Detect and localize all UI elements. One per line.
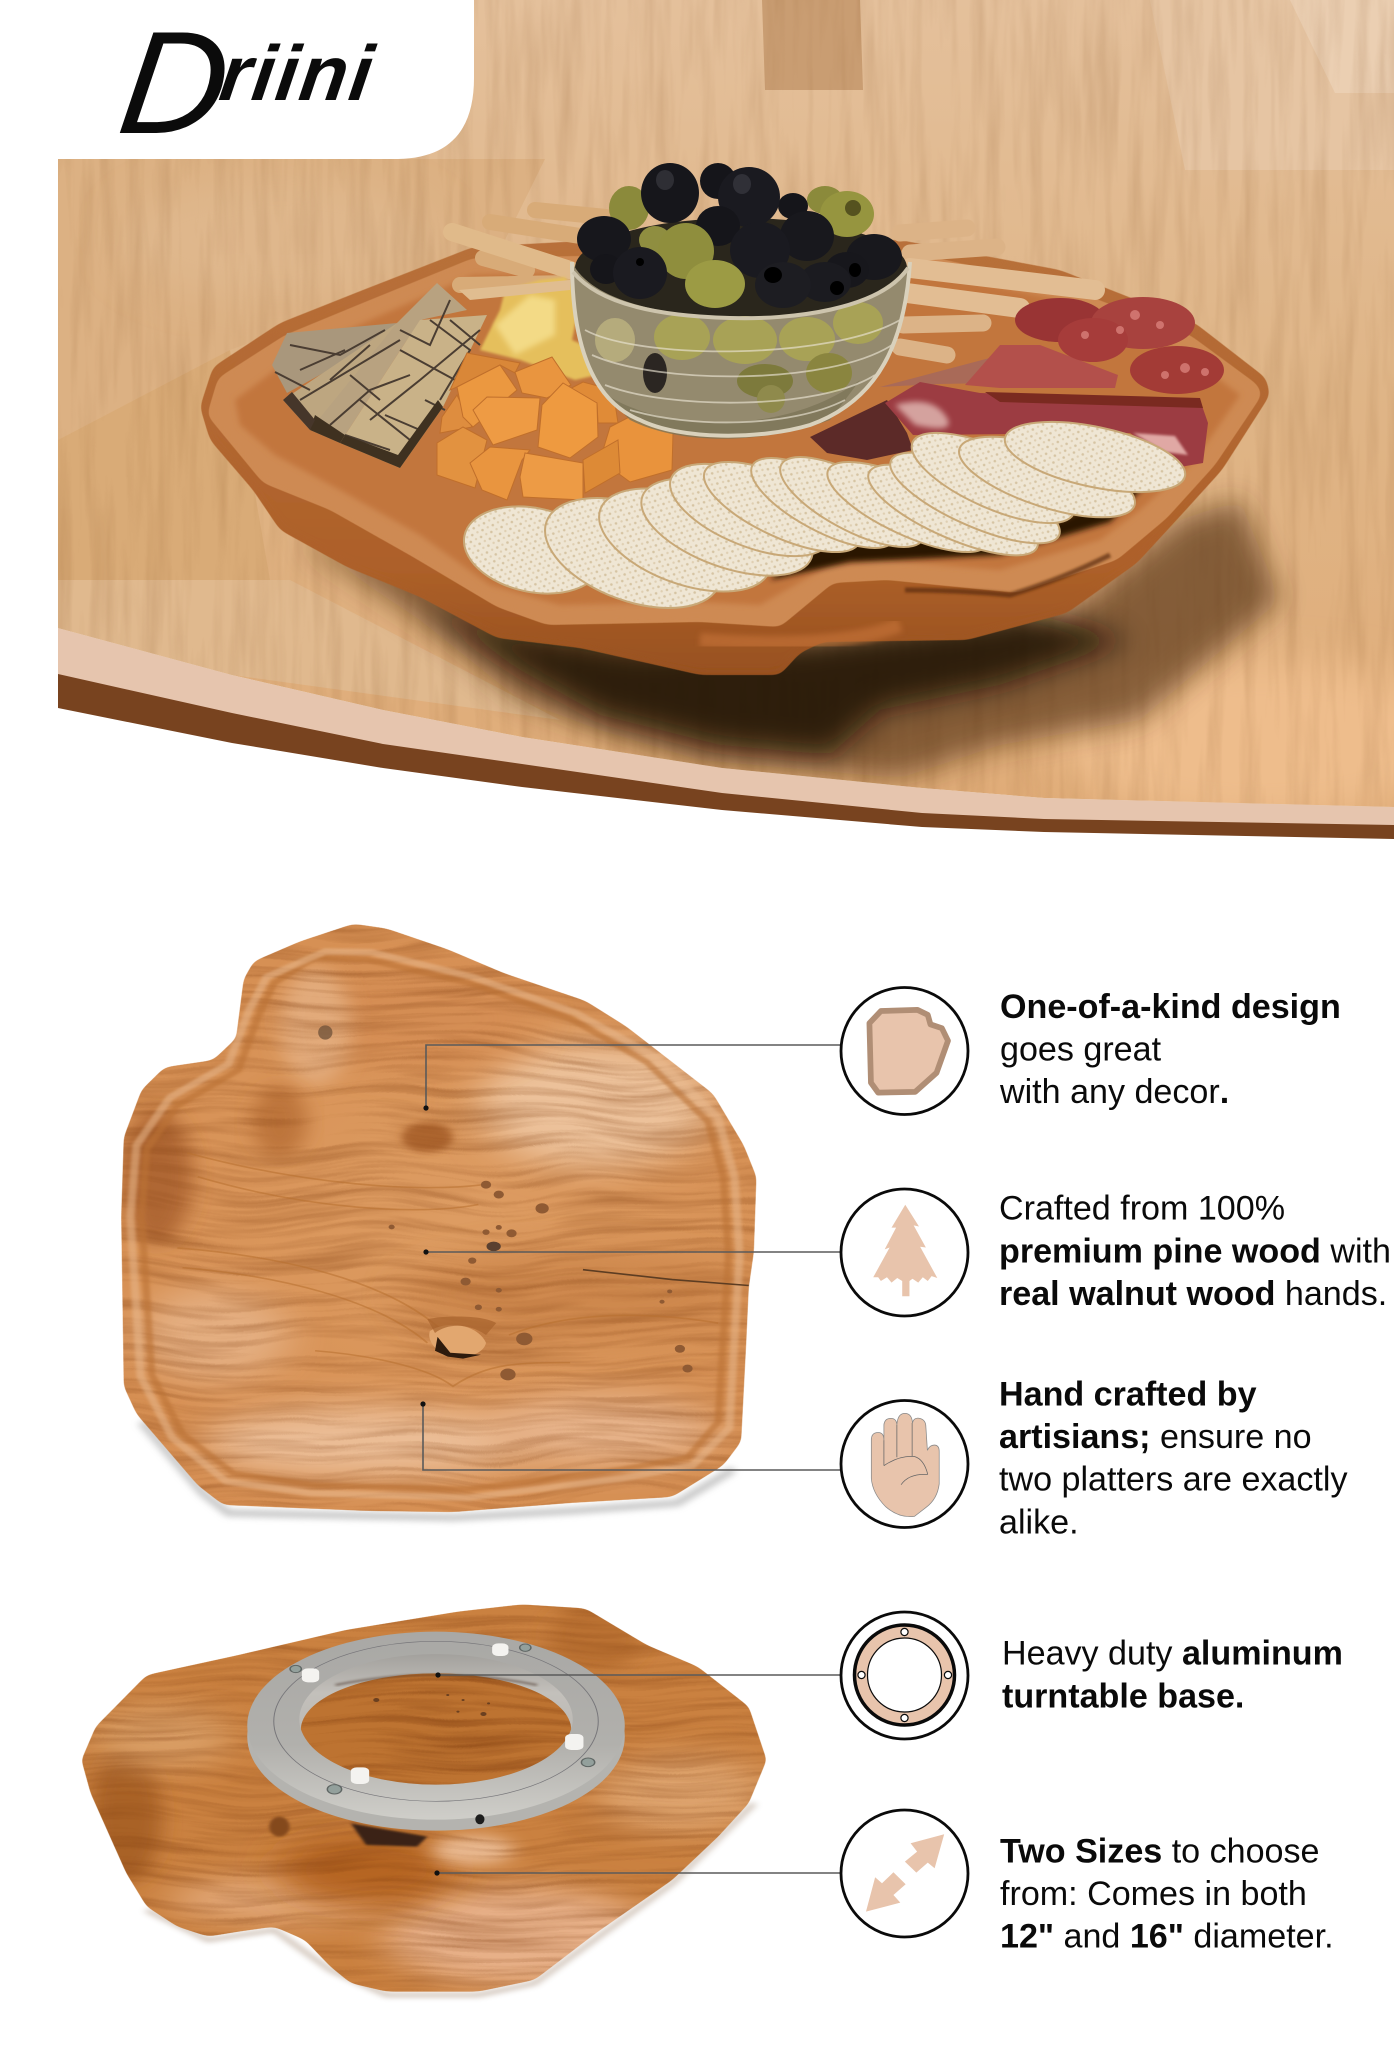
platter interior [235, 265, 1240, 605]
olives on top [577, 163, 902, 308]
text: hand crafted: alike. [999, 1504, 1079, 1542]
curved brown band [58, 673, 1394, 839]
wood tone patches [121, 967, 739, 1477]
connector: hand crafted [420, 1401, 846, 1470]
text: pine wood: real walnut wood hands. [999, 1275, 1387, 1313]
glass bowl body [572, 262, 910, 436]
feature 1: one-of-a-kind design [841, 988, 1341, 1114]
side bolt hole [475, 1814, 484, 1824]
feature 4: aluminum turntable base [841, 1612, 1343, 1739]
icon: turntable ring [841, 1612, 968, 1739]
shadow under platter [300, 500, 1280, 778]
dark cavity below ring [351, 1823, 427, 1847]
text: two sizes: from: Comes in both [1000, 1875, 1307, 1913]
text: pine wood: Crafted from 100% [999, 1190, 1285, 1228]
raised platter rim [142, 957, 728, 1489]
wooden table background [58, 0, 1394, 807]
dark knot and grain marks [318, 1025, 749, 1380]
curved peach band [58, 628, 1394, 825]
rim knots [905, 555, 1110, 595]
connector: one-of-a-kind [423, 1045, 841, 1111]
breadsticks [452, 210, 1095, 355]
logo: Driini: riini [215, 29, 381, 117]
connector: pine wood [423, 1249, 841, 1255]
text: turntable: Heavy duty aluminum [1002, 1634, 1343, 1672]
marbled cheese wedges [272, 283, 487, 468]
wooden platter [200, 240, 1270, 675]
text: pine wood: premium pine wood with [999, 1232, 1391, 1270]
text: one-of-a-kind: with any decor. [1000, 1073, 1229, 1111]
wood seen through ring [300, 1670, 575, 1787]
yellow cheese crumbles [459, 277, 597, 380]
ring inner wall [299, 1654, 573, 1785]
hero photo: charcuterie platter on wooden table [58, 0, 1394, 807]
ring top face [247, 1632, 625, 1820]
white rubber pegs [302, 1643, 583, 1784]
icon: platter outline [841, 988, 968, 1114]
logo: Driini: D [111, 2, 239, 165]
text: one-of-a-kind: One-of-a-kind design [1000, 988, 1341, 1026]
feature 5: two sizes [841, 1810, 1334, 1956]
mounting screws [290, 1644, 595, 1794]
grain swirl lines [177, 1153, 718, 1386]
text: hand crafted: two platters are exactly [999, 1460, 1348, 1498]
cured meats [810, 297, 1224, 467]
orange cheese cubes [437, 353, 673, 500]
drop shadow [147, 1803, 754, 1995]
drop shadow [142, 1422, 733, 1518]
aluminum turntable ring [247, 1632, 625, 1831]
olives inside glass [595, 302, 883, 413]
platter underside body [60, 1560, 860, 2027]
product photo: top of pine platter [60, 900, 860, 1533]
logo panel [111, 2, 384, 165]
bowl interior behind olives [575, 218, 907, 318]
text: hand crafted: artisians; ensure no [999, 1418, 1312, 1456]
glass bowl of olives [572, 163, 910, 439]
icon: hand [841, 1400, 968, 1528]
icon: pine tree [841, 1189, 968, 1316]
platter lit rim [207, 250, 1262, 627]
bowl front rim [573, 268, 908, 318]
icon: diagonal double arrow [841, 1810, 968, 1937]
connector lines with dots [420, 1045, 846, 1876]
platter body [60, 900, 860, 1533]
product photo: platter underside with aluminum turntable [60, 1560, 860, 2027]
crackers [456, 409, 1191, 630]
wood tone patches [91, 1603, 769, 1987]
text: two sizes: Two Sizes to choose [1000, 1832, 1319, 1870]
platter side wall [200, 240, 1270, 675]
text: two sizes: 12" and 16" diameter. [1000, 1918, 1334, 1956]
connector: two sizes [434, 1870, 841, 1876]
dark gap under crackers [768, 493, 1144, 584]
ring side wall [247, 1643, 625, 1831]
text: hand crafted: Hand crafted by [999, 1376, 1257, 1414]
connector: turntable [435, 1672, 841, 1678]
text: turntable: turntable base. [1002, 1678, 1244, 1716]
text: one-of-a-kind: goes great [1000, 1030, 1162, 1068]
feature 3: hand crafted [841, 1376, 1348, 1542]
feature 2: premium pine wood [841, 1189, 1391, 1316]
